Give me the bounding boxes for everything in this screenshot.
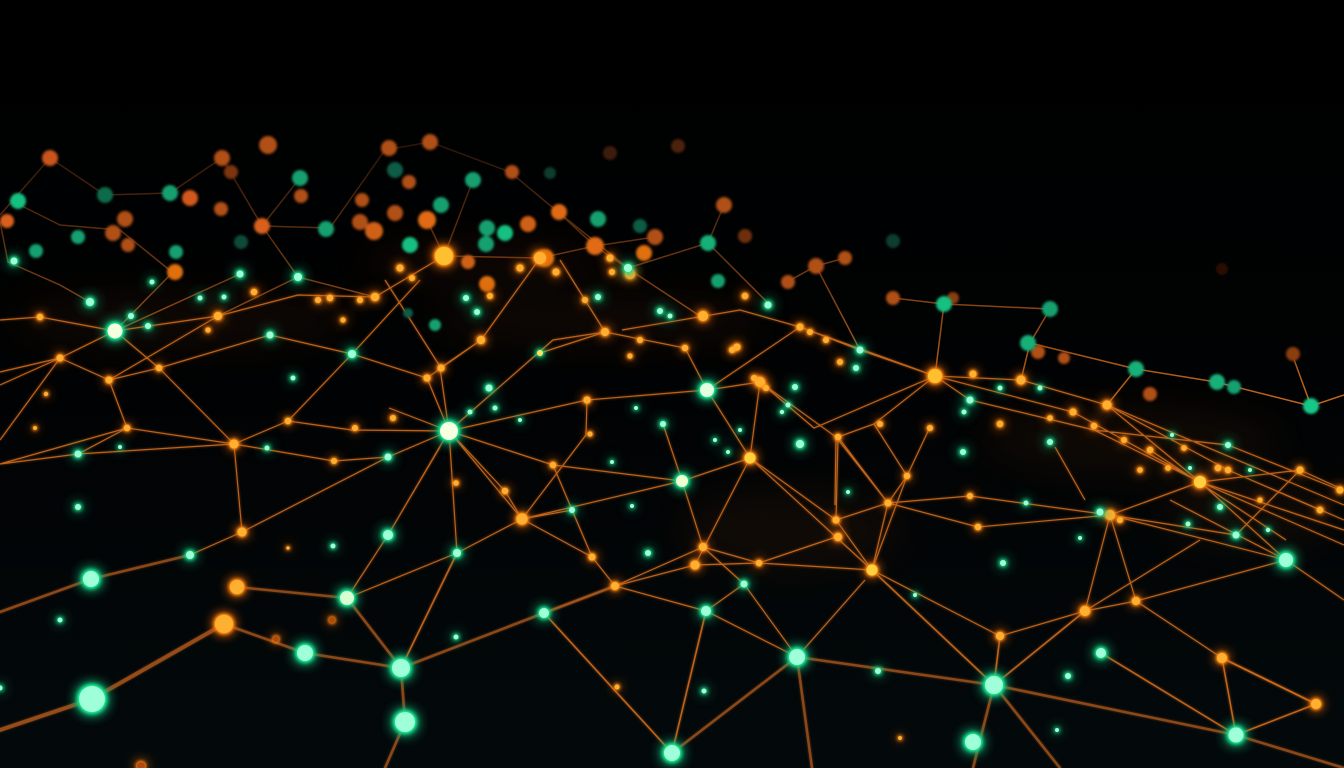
warm haze behind clusters — [10, 240, 1340, 570]
foreground thick links — [0, 553, 1344, 768]
network links — [0, 256, 1344, 704]
distant faint links — [0, 142, 1344, 406]
far teal bokeh dots — [10, 162, 1319, 414]
far orange bokeh dots — [0, 134, 1300, 401]
orange nodes — [33, 247, 1344, 768]
green nodes — [0, 258, 1293, 761]
